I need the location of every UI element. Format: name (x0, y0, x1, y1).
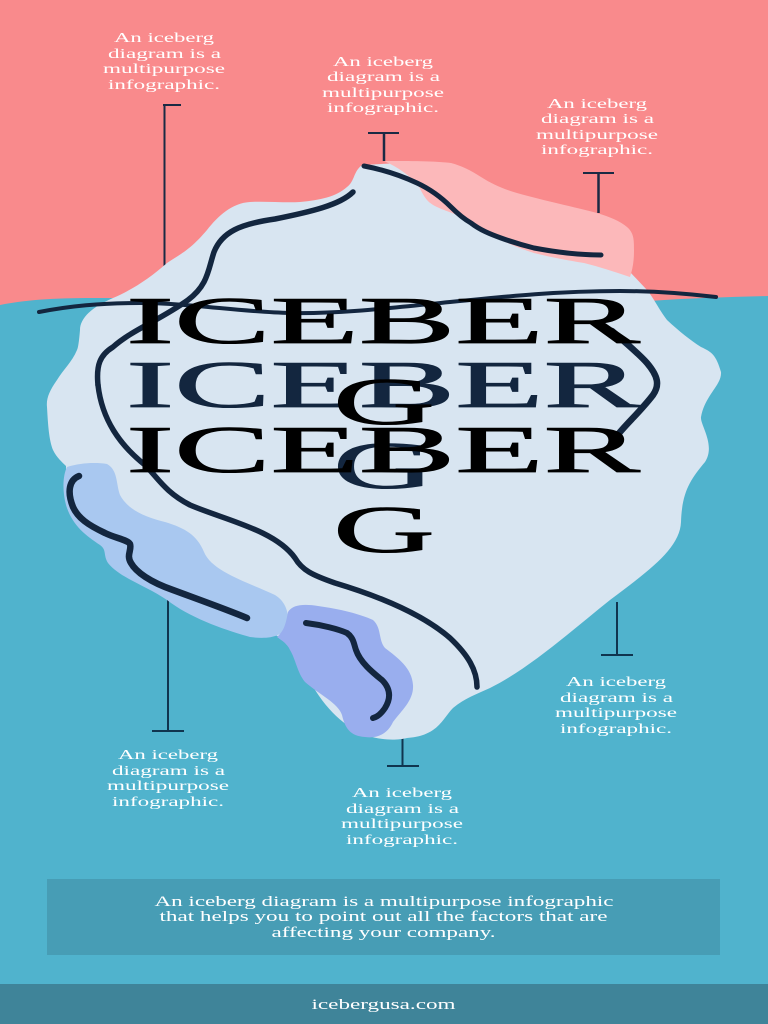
connector: top right (583, 173, 614, 213)
title: navy layer (126, 348, 641, 503)
long contour: upper (98, 192, 353, 385)
label: bottom right: An iceberg (566, 675, 666, 690)
periwinkle patch contour (306, 623, 389, 718)
label: top centre: diagram is a (327, 70, 441, 85)
label: bottom centre: An iceberg (352, 786, 452, 801)
label: top left: multipurpose (103, 62, 225, 77)
long contour: middle (98, 385, 477, 687)
light blue ice patch (63, 463, 288, 638)
label: top centre: infographic. (327, 101, 439, 116)
connector: bottom right (601, 602, 633, 655)
connector: top left (163, 105, 181, 266)
label: bottom left: diagram is a (112, 764, 226, 779)
right contour (612, 331, 657, 437)
label: bottom centre: diagram is a (346, 802, 460, 817)
label: bottom centre: infographic. (346, 833, 458, 848)
title: first black layer: ICEBER (126, 284, 641, 358)
light blue patch contour (70, 476, 247, 618)
title: second black layer: ICEBER (126, 413, 641, 487)
label: top right: multipurpose (536, 128, 658, 143)
label: bottom centre: multipurpose (341, 817, 463, 832)
label: top centre: multipurpose (322, 86, 444, 101)
description panel: affecting your company. (272, 925, 496, 941)
description panel: An iceberg diagram is a multipurpose infographic (154, 894, 614, 910)
footer bar (0, 984, 768, 1024)
label: bottom right (555, 675, 677, 737)
connector: bottom centre (387, 736, 419, 766)
label: top right (536, 97, 658, 158)
label: top centre: An iceberg (333, 55, 433, 70)
label: bottom right: diagram is a (560, 691, 674, 706)
label: top right: An iceberg (547, 97, 647, 112)
contour lines (39, 166, 716, 718)
label: bottom left: infographic. (112, 795, 224, 810)
description panel: that helps you to point out all the factors that are (160, 909, 608, 925)
label: top right: infographic. (541, 143, 653, 158)
summit contour (364, 166, 601, 255)
connector: top centre (368, 133, 399, 161)
footer bar: icebergusa.com (312, 997, 457, 1013)
waterline contour (39, 291, 716, 313)
label: bottom left: An iceberg (118, 748, 218, 763)
label: top right: diagram is a (541, 112, 655, 127)
title: second black layer (126, 413, 641, 567)
label: top left: infographic. (108, 78, 220, 93)
label: top left (103, 31, 225, 93)
label: bottom left (107, 748, 229, 810)
title: navy layer: G (333, 429, 435, 503)
label: top left: An iceberg (114, 31, 214, 46)
label: bottom centre (341, 786, 463, 848)
description panel (47, 879, 720, 955)
title: first black layer (126, 284, 641, 439)
connector: bottom left (152, 598, 184, 731)
label: top centre (322, 55, 444, 116)
pink ice cap (384, 161, 634, 277)
title: navy layer: ICEBER (126, 348, 641, 422)
label: bottom left: multipurpose (107, 779, 229, 794)
background: water (0, 296, 768, 1024)
iceberg body (47, 163, 721, 740)
title: second black layer: G (333, 493, 435, 567)
title: first black layer: G (333, 365, 435, 439)
label: top left: diagram is a (108, 47, 222, 62)
label: bottom right: infographic. (560, 722, 672, 737)
periwinkle ice patch (277, 605, 413, 737)
label: bottom right: multipurpose (555, 706, 677, 721)
